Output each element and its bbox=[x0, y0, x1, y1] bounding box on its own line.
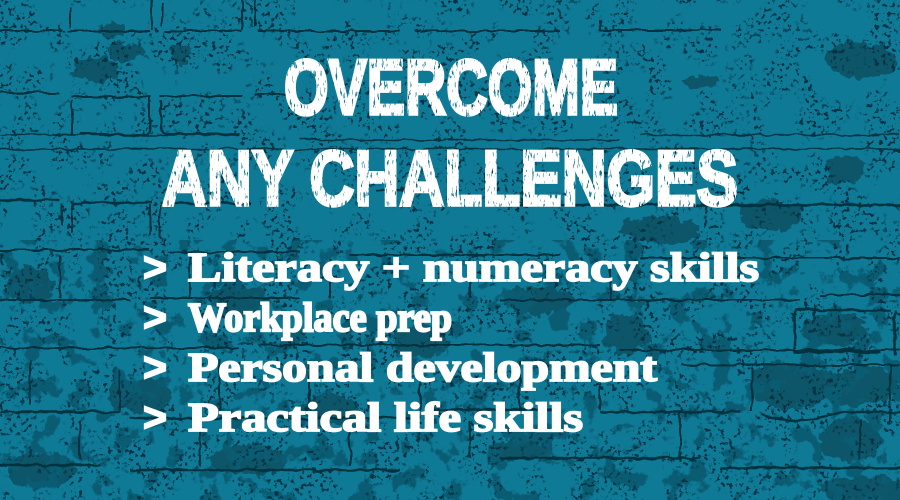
wall texture: mottling bbox=[0, 240, 900, 500]
bullet list bbox=[143, 244, 759, 440]
bullet 2: > bbox=[143, 294, 167, 340]
title bbox=[162, 43, 738, 222]
title line 1: OVERCOME bbox=[284, 43, 618, 131]
bullet 2: Workplace prep bbox=[188, 294, 452, 340]
bullet 4: Practical life skills bbox=[188, 394, 583, 440]
bullet 1: > bbox=[143, 244, 167, 290]
bullet 3: > bbox=[143, 344, 167, 390]
bullet 3: Personal development bbox=[188, 344, 657, 390]
title line 2: ANY CHALLENGES bbox=[162, 134, 738, 222]
bullet 1: Literacy + numeracy skills bbox=[188, 244, 759, 290]
bullet 4: > bbox=[143, 394, 167, 440]
